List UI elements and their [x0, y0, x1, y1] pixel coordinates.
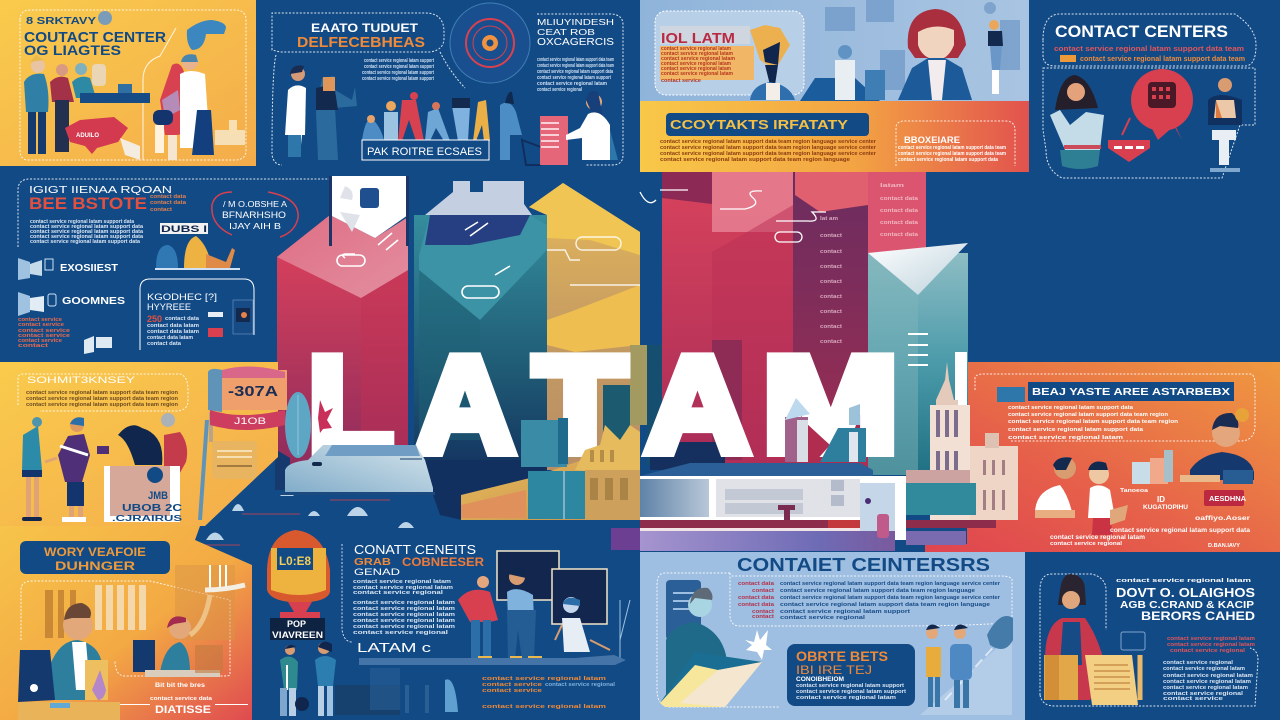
figures at desk: DUBS I	[161, 224, 207, 234]
caption: diatisse: Bit bit the bres	[155, 683, 206, 689]
info box: orate sets: OBRTE BETS	[796, 648, 888, 664]
panel: yellow lower left	[0, 362, 287, 720]
info box: orate sets	[787, 644, 915, 706]
info box: orate sets: CONOIBHEIOM	[796, 676, 844, 683]
text block: contact service regional latam	[1163, 666, 1245, 672]
text block: contact service regional latam support data team region language	[780, 588, 975, 594]
lounge silhouette	[335, 668, 458, 715]
illustration: pale tower	[930, 362, 1018, 522]
title: LATAM: A	[646, 328, 750, 480]
callout: bboxeiare	[896, 121, 1015, 166]
heading: occagercies	[537, 18, 614, 48]
text block: contact service regional latam	[1163, 685, 1248, 691]
icon: star	[745, 630, 772, 660]
connector glyph	[337, 233, 398, 266]
text block: contact service regional latam	[353, 585, 453, 591]
panel: contat ceneits navy bottom	[267, 528, 640, 716]
callout: red oval: / M O.OBSHE A	[223, 200, 288, 209]
bar	[359, 655, 626, 665]
text block: contact service regional latam	[353, 579, 451, 585]
icon: red box	[65, 117, 140, 160]
text block: red list: contact service	[18, 317, 62, 323]
panel: dovt navy	[1025, 552, 1280, 720]
info box: contact data	[165, 316, 200, 322]
heading: delfecebheas: EAATO TUDUET	[311, 23, 418, 35]
heading: dovt: contact service regional latam	[1116, 578, 1251, 584]
text block: small labels	[1050, 488, 1251, 549]
text block: contact service regional latam support data	[1008, 405, 1134, 411]
heading: occagercies: MLIUYINDESH	[537, 18, 614, 27]
callout: IOL LATM: contact service regional latam	[661, 71, 733, 77]
heading: occagercies: CEAT ROB	[537, 27, 595, 37]
caption: diatisse: DIATISSE	[155, 704, 211, 716]
icon: blue globe	[987, 616, 1013, 649]
callout: rohmit: contact service regional latam support data team region	[26, 390, 179, 396]
text block	[353, 579, 455, 636]
icon row: exosiiest: EXOSIIEST	[60, 263, 118, 274]
label box: PAK ROITRE ECSAES	[367, 146, 482, 158]
text block: red list	[18, 317, 70, 349]
two students	[920, 624, 1012, 715]
text block: contact service regional latam	[353, 624, 455, 630]
building: purple tower: contact	[820, 264, 842, 270]
text block: contact service regional latam support data	[30, 239, 141, 245]
text block: red lines	[1054, 46, 1245, 63]
text block: contact service regional latam support data team	[537, 57, 614, 63]
callout: IOL LATM: contact service regional latam	[661, 66, 731, 72]
info box: orate sets: contact service regional latam	[796, 695, 896, 701]
text block: small labels: Tanoeoa	[1120, 488, 1149, 494]
icon: white pillar	[1210, 130, 1240, 172]
text block: small labels: D.BAN.IAVY	[1208, 543, 1240, 549]
info box: contact data latam	[147, 335, 193, 341]
heading: conatt ceneits: CONATT CENEITS	[354, 542, 476, 557]
two people talking	[280, 642, 336, 716]
dashed frame with shelves	[21, 565, 245, 676]
text block: contact service regional latam	[1008, 435, 1123, 441]
icon: red heart tag	[1108, 118, 1150, 162]
heading: bee estote: contact data	[150, 194, 187, 200]
column: olive and dark gap	[630, 345, 662, 465]
text block: contact service	[1163, 696, 1223, 702]
callout: IOL LATM: contact service regional latam	[661, 56, 735, 62]
callout: IOL LATM	[655, 11, 804, 95]
group of staff at desk	[24, 55, 150, 154]
text block: small labels: contact service regional latam	[1050, 535, 1145, 541]
icon: red speech bubble	[1131, 69, 1193, 140]
label: LATAM: LATAM c	[357, 640, 432, 655]
text block: contact data	[738, 595, 775, 601]
callout: bboxeiare: BBOXEIARE	[904, 135, 960, 145]
building: pink tower with data: contact data	[880, 220, 919, 226]
text block	[1163, 636, 1255, 702]
title: LATAM: M	[762, 328, 898, 480]
heading: contact center	[24, 11, 166, 58]
panel: orange-red lower right	[975, 374, 1255, 549]
building: crimson tower	[640, 172, 793, 470]
person: man	[1208, 78, 1242, 125]
info box: orate sets: contact service regional latam support	[796, 683, 904, 689]
text block: contact service regional latam support data	[537, 69, 614, 75]
people with monitors	[800, 45, 885, 101]
callout: IOL LATM: IOL LATM	[661, 30, 735, 47]
text block: contact service regional latam support data team region language service center	[660, 139, 877, 145]
building: pink tower with data: contact data	[880, 196, 919, 202]
text block: contact service regional latam	[1167, 636, 1255, 642]
info box: contact data	[147, 341, 182, 347]
text block: small labels: KUGATIOPIHU	[1143, 505, 1188, 511]
heading: delfecebheas: DELFECEBHEAS	[297, 34, 425, 51]
worker and shelf	[500, 91, 618, 165]
text block: contact service regional latam support data team region language	[780, 602, 990, 608]
icon row: goomnes: GOOMNES	[62, 296, 125, 307]
heading: conatt ceneits: COBNEESER	[402, 555, 484, 569]
title: LATAM: L	[308, 328, 393, 480]
callout: rohmit: SOHMIT3KNSEY	[27, 375, 135, 385]
building: purple tower: contact	[820, 233, 842, 239]
text block: contact service regional latam support	[364, 64, 434, 70]
badge: L0:E8	[279, 554, 311, 568]
illustration: low building	[640, 463, 996, 551]
icon row: exosiiest	[18, 258, 118, 280]
text block: contact service regional latam	[353, 600, 455, 606]
callout: IOL LATM: contact service regional latam	[661, 61, 731, 67]
info box: contact data latam	[147, 329, 199, 335]
caption: diatisse	[120, 683, 248, 716]
text block: contact service regional latam support data team	[537, 63, 614, 69]
text block: contact service regional latam	[1167, 642, 1255, 648]
heading: dovt: AGB C.CRAND & KACIP	[1120, 599, 1254, 611]
caption: diatisse: contact service data	[150, 696, 213, 702]
illustration: small towers	[785, 398, 866, 462]
building: pink tower with data: latam	[880, 183, 904, 189]
small figure	[988, 20, 1003, 94]
text block: contact	[752, 614, 774, 620]
icon: objects	[1132, 450, 1173, 484]
person: man with laptop	[18, 603, 120, 720]
photo card: JMB	[148, 490, 168, 502]
icon: document	[84, 336, 112, 354]
text block: contact	[752, 609, 774, 615]
note card	[212, 441, 257, 479]
text block: contact service regional latam support data team region language service center	[780, 595, 1001, 601]
skyline silhouette	[825, 0, 1020, 90]
text block: contact service regional latam	[537, 81, 607, 87]
text block	[660, 139, 877, 163]
label box	[362, 140, 489, 160]
info box: orate sets: contact service regional latam support	[796, 689, 906, 695]
callout: rohmit: contact service regional latam support data team region	[26, 402, 179, 408]
text block: red list: contact service	[18, 338, 62, 344]
callout: rohmit: contact service regional latam support data team region	[26, 396, 179, 402]
building: pink tower with data: contact data	[880, 232, 919, 238]
heading: bee estote: contact data	[150, 200, 187, 206]
title: LATAM	[308, 328, 898, 480]
text block: contact service regional latam support	[780, 609, 910, 615]
person: orange head	[750, 25, 795, 100]
text block: contact service regional latam	[353, 606, 455, 612]
icon row: goomnes	[18, 292, 125, 316]
icon: leaf and branch	[285, 392, 333, 458]
person: woman with folder	[1044, 574, 1145, 705]
text block: red list: contact service	[18, 328, 70, 334]
screens and team	[458, 551, 630, 665]
text block: contact service regional latam support	[362, 70, 434, 76]
heading: dovt: DOVT O. OLAIGHOS	[1116, 586, 1255, 600]
illustration: vehicle	[280, 445, 435, 495]
label: aesdhna: AESDHNA	[1209, 494, 1247, 503]
icon: open book	[660, 652, 762, 707]
pair in red and white	[153, 54, 245, 160]
heading: contaiet ceintersrs: CONTAIET CEINTERSRS	[737, 555, 990, 575]
icon: blue speech blob	[187, 20, 226, 50]
building: purple tower: contact	[820, 279, 842, 285]
building: purple tower: contact	[820, 294, 842, 300]
callout: red oval	[212, 192, 298, 237]
heading: conatt ceneits: GRAB	[354, 556, 391, 568]
title bar	[666, 113, 869, 136]
callout: IOL LATM: contact service regional latam	[661, 51, 733, 57]
text block: contact service regional	[1163, 691, 1244, 697]
panel: contact center yellow	[0, 0, 256, 166]
heading: bee estote: IGIGT IIENAA RQOAN	[29, 185, 172, 196]
person: woman with headset	[133, 595, 223, 677]
navy landscape base	[194, 449, 640, 720]
text block: contact service regional latam support data	[1008, 427, 1144, 433]
text block: small labels: contact service regional	[1050, 541, 1123, 547]
text block: small labels: contact service regional latam support data	[1110, 528, 1251, 534]
heading box: wory veafoie: DUHNGER	[55, 559, 135, 573]
building: teal glass tower	[868, 243, 968, 475]
building: yellow block	[529, 183, 640, 475]
text block: contact service regional latam	[1163, 679, 1251, 685]
panel: contact centers light blue	[640, 552, 1025, 720]
panel: navy top middle	[272, 3, 623, 165]
title bar: CCOYTAKTS IRFATATY	[670, 117, 848, 132]
text block: contact service regional latam support data	[30, 224, 144, 230]
text block: red list: contact service	[18, 333, 70, 339]
callout: bboxeiare: contact service regional latam support data team	[898, 151, 1006, 157]
text block: contact service regional	[780, 615, 866, 621]
badge	[267, 530, 330, 618]
info box: KGODHEC [?]	[147, 292, 217, 302]
presenters	[285, 65, 357, 160]
panel background: orange-red	[925, 362, 1280, 552]
two staff	[1035, 457, 1128, 535]
person: man portrait	[1180, 408, 1254, 484]
text block: contact data	[738, 602, 775, 608]
text block: contact service regional latam support	[362, 76, 434, 82]
photo card	[104, 466, 183, 523]
people exchanging	[22, 413, 187, 522]
text block: orange notes	[482, 676, 616, 710]
heading: contact centers: CONTACT CENTERS	[1055, 22, 1228, 41]
text block: small labels: oaffiyo.Aoser	[1195, 516, 1251, 522]
text block: contact service regional latam support	[364, 58, 434, 64]
illustration: gold city	[461, 418, 640, 520]
crowd	[362, 92, 490, 141]
info box: 250	[147, 314, 162, 324]
building: purple tower: contact	[820, 324, 842, 330]
callout: rohmit	[18, 374, 188, 411]
purple block edge	[611, 528, 640, 550]
text block: contact service regional latam support data team region language service center	[780, 581, 1001, 587]
title bar	[997, 382, 1234, 402]
heading box: wory veafoie	[20, 541, 170, 574]
photo card: .CJRAIRUS	[112, 514, 183, 523]
figures at desk	[155, 223, 240, 270]
callout: bboxeiare: contact service regional latam support data	[898, 157, 999, 163]
text block: contact service regional latam support	[537, 75, 611, 81]
text block: contact service regional latam support data team region language service center	[660, 145, 877, 151]
heading: contact center: OG LIAGTES	[24, 42, 121, 58]
heading: conatt ceneits	[354, 542, 484, 577]
person: red-haired woman	[898, 9, 972, 100]
heading: dovt	[1116, 578, 1255, 623]
text block: contact service regional latam	[353, 618, 455, 624]
heading: dovt: BERORS CAHED	[1141, 611, 1255, 623]
text block: contact data	[738, 581, 775, 587]
panel: IOL LATM light blue	[640, 0, 1029, 101]
text block: contact service regional latam support data team region language	[660, 157, 850, 163]
callout: bboxeiare: contact service regional latam support data team	[898, 145, 1006, 151]
text block: orange notes: contact service	[482, 682, 542, 688]
label: pop	[270, 618, 325, 640]
label: aesdhna	[1204, 490, 1247, 506]
heading: delfecebheas	[297, 23, 425, 51]
text block: contact service regional	[1170, 648, 1246, 654]
text block: contact service regional latam support data	[30, 219, 135, 225]
callout: IOL LATM: contact service regional latam	[661, 46, 731, 52]
panel: orange band	[640, 101, 1029, 172]
text block: contact service regional latam support data team region language service center	[660, 151, 877, 157]
text block: contact service regional latam support data	[30, 229, 144, 235]
text block	[30, 219, 144, 245]
heading box: wory veafoie: WORY VEAFOIE	[44, 545, 146, 559]
text block: orange notes: contact service regional	[545, 682, 616, 688]
icon: circular target	[450, 3, 530, 83]
info box: orate sets: IBI IRE TEJ	[796, 663, 872, 677]
heading: contact center: 8 SRKTAVY	[26, 16, 96, 27]
text block: orange notes: contact service	[482, 688, 542, 694]
building: red block	[277, 176, 409, 470]
panel: contact centers navy	[1043, 14, 1256, 178]
text block	[738, 581, 1001, 621]
heading: contact center: COUTACT CENTER	[24, 29, 166, 46]
title: LATAM: A	[416, 328, 514, 480]
text block: contact service regional	[537, 87, 582, 93]
label: pop: VIAVREEN	[272, 630, 323, 640]
building: purple tower	[775, 172, 868, 467]
text block: orange notes: contact service regional latam	[482, 676, 606, 682]
building: purple tower: contact	[820, 249, 842, 255]
person: man reading	[666, 580, 726, 700]
info box: HYYREEE	[147, 302, 191, 312]
info box	[140, 279, 254, 350]
text block: contact service regional latam support data team region	[1008, 412, 1169, 418]
text block: red list: contact service	[18, 322, 64, 328]
label: pop: POP	[287, 619, 306, 629]
info box: contact data latam	[147, 323, 199, 329]
text block: contact	[752, 588, 774, 594]
building: purple tower: contact	[820, 339, 842, 345]
heading: conatt ceneits: GENAD	[354, 567, 401, 577]
heading: bee estote: BEE BSTOTE	[29, 194, 147, 213]
sign post	[198, 366, 287, 520]
text block: contact service regional latam support data team region	[1008, 419, 1179, 425]
text block: contact service regional	[353, 630, 449, 636]
text block: orange notes: contact service regional latam	[482, 704, 606, 710]
text block: red list: contact	[18, 343, 48, 349]
building: pink tower with data	[868, 172, 926, 262]
text block: contact service regional	[353, 590, 444, 596]
text block: contact service regional	[1163, 660, 1234, 666]
callout: IOL LATM: contact service	[661, 78, 701, 84]
connector glyph	[462, 222, 510, 298]
photo card: UBOB 2C	[122, 503, 182, 514]
text block: contact service regional latam support data	[30, 234, 144, 240]
building: teal block	[414, 181, 547, 475]
heading: occagercies: OXCAGERCIS	[537, 37, 614, 48]
text block: contact service regional latam	[353, 612, 455, 618]
person: woman	[1050, 75, 1104, 169]
callout: red oval: BFNARHSHO	[222, 210, 286, 220]
sign post: -307A	[228, 383, 278, 400]
building: purple tower: contact	[820, 309, 842, 315]
text block: small labels: ID	[1157, 495, 1165, 504]
text block: contact service regional latam	[1163, 673, 1253, 679]
heading: bee estote: contact	[150, 207, 172, 213]
panel: bee estote left	[18, 179, 330, 354]
heading: bee estote	[29, 185, 187, 213]
text block: red lines: contact service regional latam support data team	[1054, 46, 1244, 53]
building: purple tower: lat am	[820, 216, 838, 222]
sign post: J1OB	[234, 416, 266, 426]
building: pink tower with data: contact data	[880, 208, 919, 214]
text block: red lines: contact service regional latam support data team	[1080, 56, 1245, 63]
title: LATAM: T	[534, 328, 626, 480]
title bar: BEAJ YASTE AREE ASTARBEBX	[1032, 387, 1230, 398]
icon: red box: ADUILO	[76, 133, 99, 139]
text block	[362, 57, 614, 93]
callout: red oval: IJAY AIH B	[229, 221, 281, 231]
text block	[1008, 405, 1179, 441]
